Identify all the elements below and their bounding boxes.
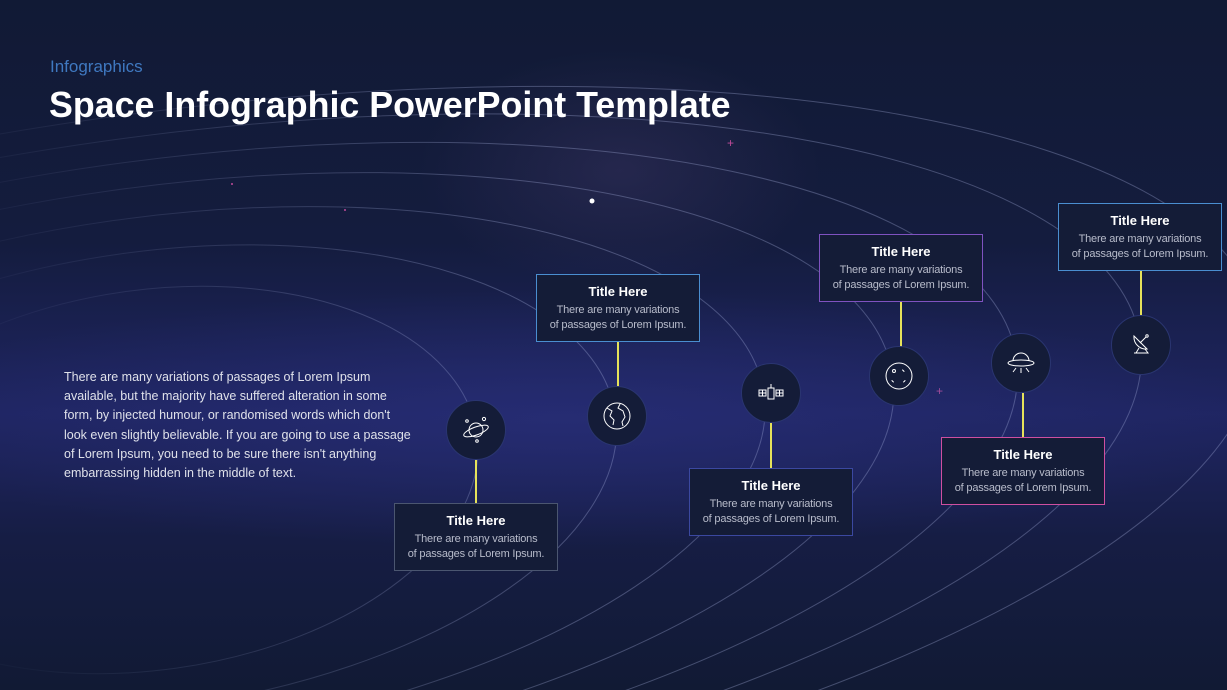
box 3: There are many variations (710, 498, 832, 510)
box 5 (941, 437, 1105, 505)
icon: earth (587, 386, 647, 446)
box 2: of passages of Lorem Ipsum. (550, 319, 686, 331)
body text: of Lorem Ipsum, you need to be sure there isn't anything (64, 447, 376, 461)
icon: moon (869, 346, 929, 406)
box 1: There are many variations (415, 533, 537, 545)
orbits: + (727, 136, 734, 150)
box 1: Title Here (446, 513, 506, 528)
body text: look even slightly believable. If you are going to use a passage (64, 428, 411, 442)
box 4: There are many variations (840, 264, 962, 276)
title: Space Infographic PowerPoint Template (49, 85, 731, 125)
box 4: of passages of Lorem Ipsum. (833, 279, 969, 291)
box 6: There are many variations (1079, 233, 1201, 245)
box 1: of passages of Lorem Ipsum. (408, 548, 544, 560)
orbits: + (936, 384, 943, 398)
box 5: of passages of Lorem Ipsum. (955, 482, 1091, 494)
box 5: There are many variations (962, 467, 1084, 479)
subtitle: Infographics (50, 57, 143, 76)
body text (64, 370, 411, 480)
box 6 (1058, 203, 1222, 271)
icon: satellite dish (1111, 315, 1171, 375)
icon: satellite (741, 363, 801, 423)
box 3: of passages of Lorem Ipsum. (703, 513, 839, 525)
box 6: Title Here (1110, 213, 1170, 228)
box 3: Title Here (741, 478, 800, 493)
icon: ufo (991, 333, 1051, 393)
box 5: Title Here (993, 447, 1052, 462)
box 2: There are many variations (557, 304, 679, 316)
body text: form, by injected humour, or randomised words which don't (64, 408, 390, 422)
box 1 (394, 503, 558, 571)
body text: available, but the majority have suffered alteration in some (64, 389, 387, 403)
box 4 (819, 234, 983, 302)
box 2 (536, 274, 700, 342)
box 2: Title Here (588, 284, 648, 299)
box 4: Title Here (871, 244, 930, 259)
connectors (475, 271, 1166, 503)
box 6: of passages of Lorem Ipsum. (1072, 248, 1208, 260)
icon: planet (446, 400, 506, 460)
body text: embarrassing hidden in the middle of text. (64, 466, 296, 480)
body text: There are many variations of passages of Lorem Ipsum (64, 370, 370, 384)
box 3 (689, 468, 853, 536)
